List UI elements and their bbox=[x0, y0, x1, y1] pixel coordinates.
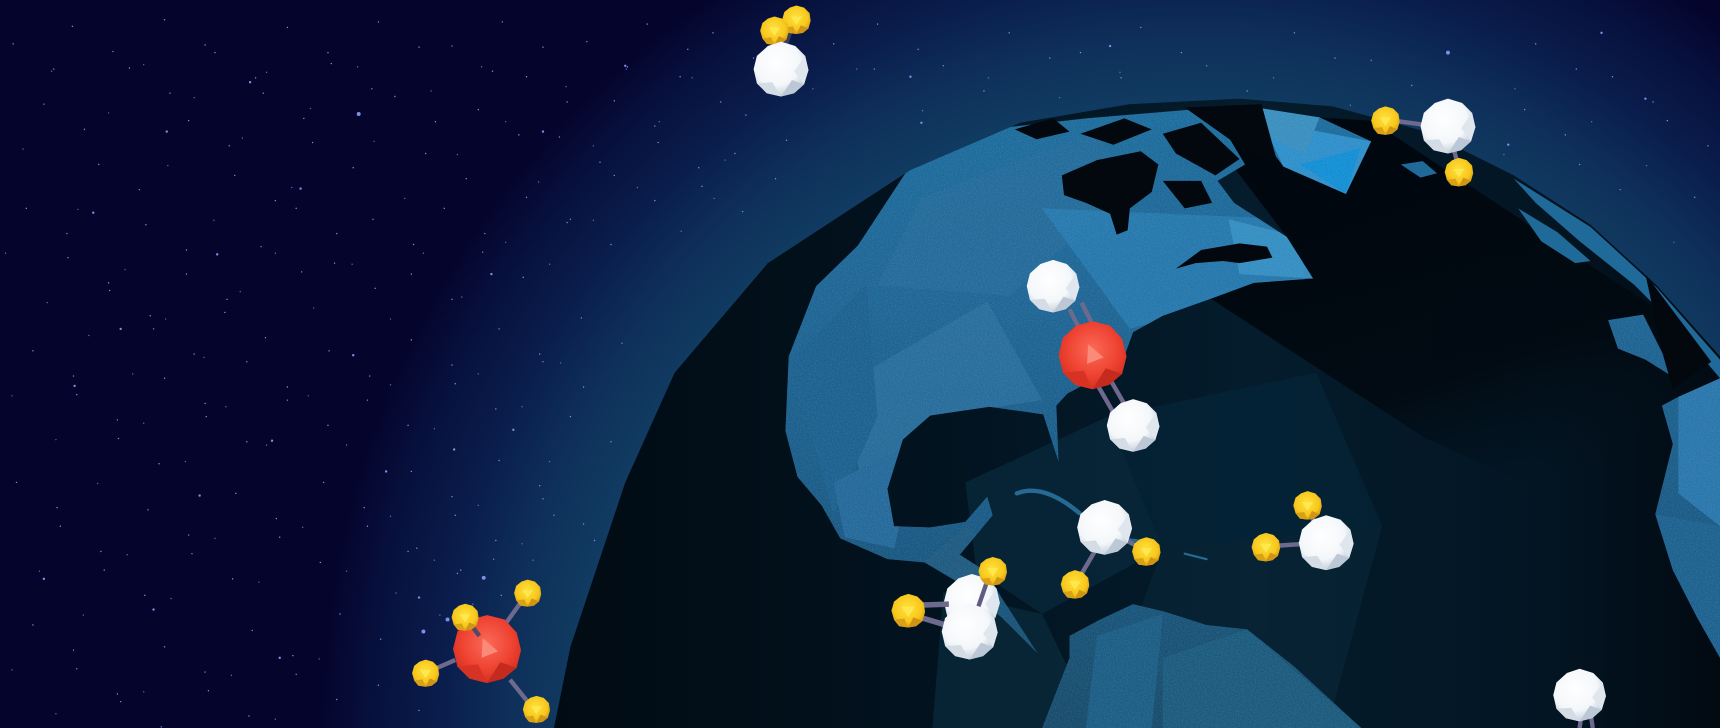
molecule: top right, white atom with two yellow atoms bbox=[1371, 99, 1475, 186]
molecule: Atlantic, white atom with two yellow atoms bbox=[1252, 491, 1354, 570]
molecule: Caribbean, white atom with two yellow atoms bbox=[1061, 500, 1161, 599]
molecule: centre, red atom double bonded to two white atoms bbox=[1027, 260, 1159, 452]
globe bbox=[548, 93, 1720, 728]
arctic land and northern Europe strips bbox=[1401, 161, 1720, 378]
molecule: top, white atom with two yellow atoms bbox=[754, 5, 811, 96]
molecule: Central America, overlapping white atoms with yellow atoms bbox=[891, 557, 1007, 659]
dark bays and arctic channels bbox=[1015, 104, 1711, 389]
ocean: dark faceted surface bbox=[548, 93, 1720, 728]
molecule: bottom right, white atom with double bond bbox=[1553, 669, 1606, 728]
continents: land masses with facets bbox=[768, 99, 1720, 728]
molecule: lower left, red atom with four yellow atoms bbox=[412, 580, 550, 723]
Cuba and Caribbean islands bbox=[1017, 491, 1207, 559]
